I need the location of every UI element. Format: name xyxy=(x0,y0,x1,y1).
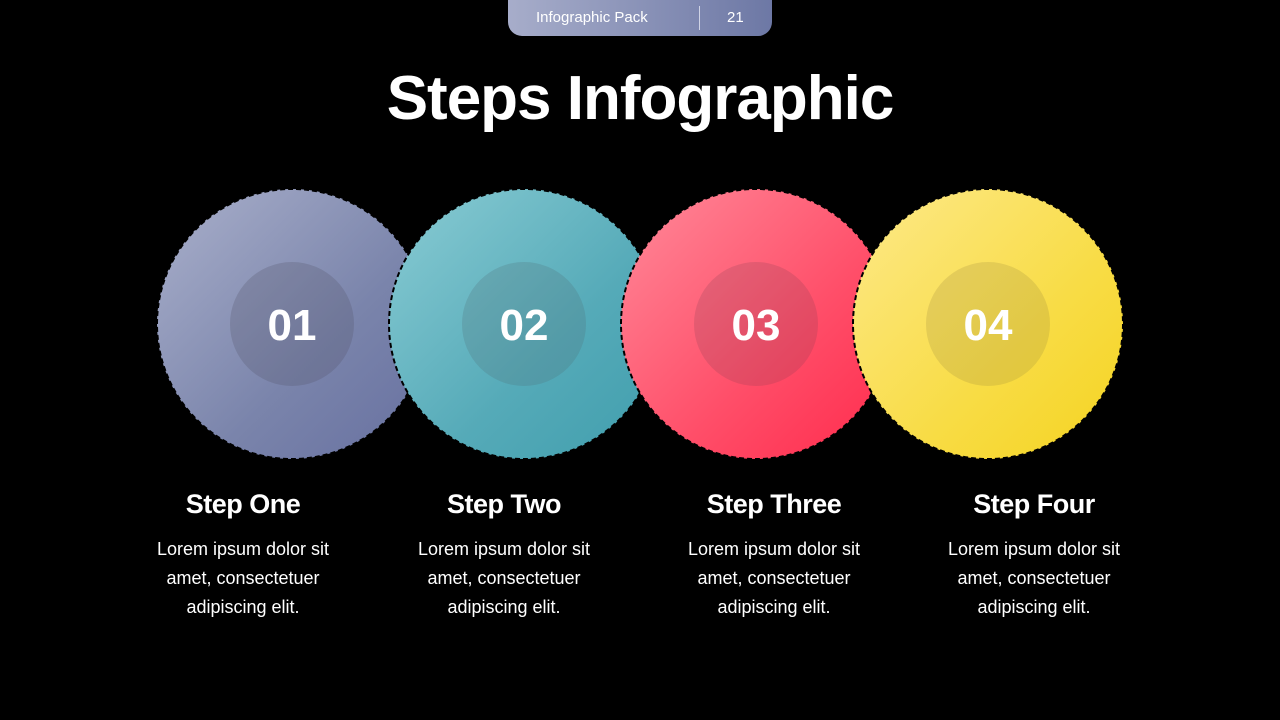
step four text: Step Four xyxy=(973,489,1095,519)
step one text xyxy=(157,489,329,617)
circle 04: 04 xyxy=(964,301,1013,350)
step four text xyxy=(948,489,1120,617)
circle 03 xyxy=(621,189,891,459)
step one text: amet, consectetuer xyxy=(166,568,320,588)
step three text: adipiscing elit. xyxy=(717,597,831,617)
step three text: Lorem ipsum dolor sit xyxy=(688,539,860,559)
step four text: amet, consectetuer xyxy=(957,568,1111,588)
step two text: Step Two xyxy=(447,489,561,519)
step four text: Lorem ipsum dolor sit xyxy=(948,539,1120,559)
step four text: adipiscing elit. xyxy=(977,597,1091,617)
step three text xyxy=(688,489,860,617)
step two text: Lorem ipsum dolor sit xyxy=(418,539,590,559)
step one text: Lorem ipsum dolor sit xyxy=(157,539,329,559)
step two text: adipiscing elit. xyxy=(447,597,561,617)
step two text: amet, consectetuer xyxy=(427,568,581,588)
header tab xyxy=(508,0,772,36)
header tab: 21 xyxy=(727,9,744,26)
title: Steps Infographic xyxy=(387,64,893,133)
circle 03: 03 xyxy=(732,301,780,350)
step one text: adipiscing elit. xyxy=(186,597,300,617)
circle 04 xyxy=(853,189,1123,459)
step three text: Step Three xyxy=(707,489,841,519)
step one text: Step One xyxy=(186,489,300,519)
step three text: amet, consectetuer xyxy=(697,568,851,588)
circle 02 xyxy=(389,189,659,459)
circle 01: 01 xyxy=(268,301,316,350)
circle 02: 02 xyxy=(500,301,548,350)
step two text xyxy=(418,489,590,617)
circle 01 xyxy=(157,189,427,459)
header tab: Infographic Pack xyxy=(536,9,648,26)
